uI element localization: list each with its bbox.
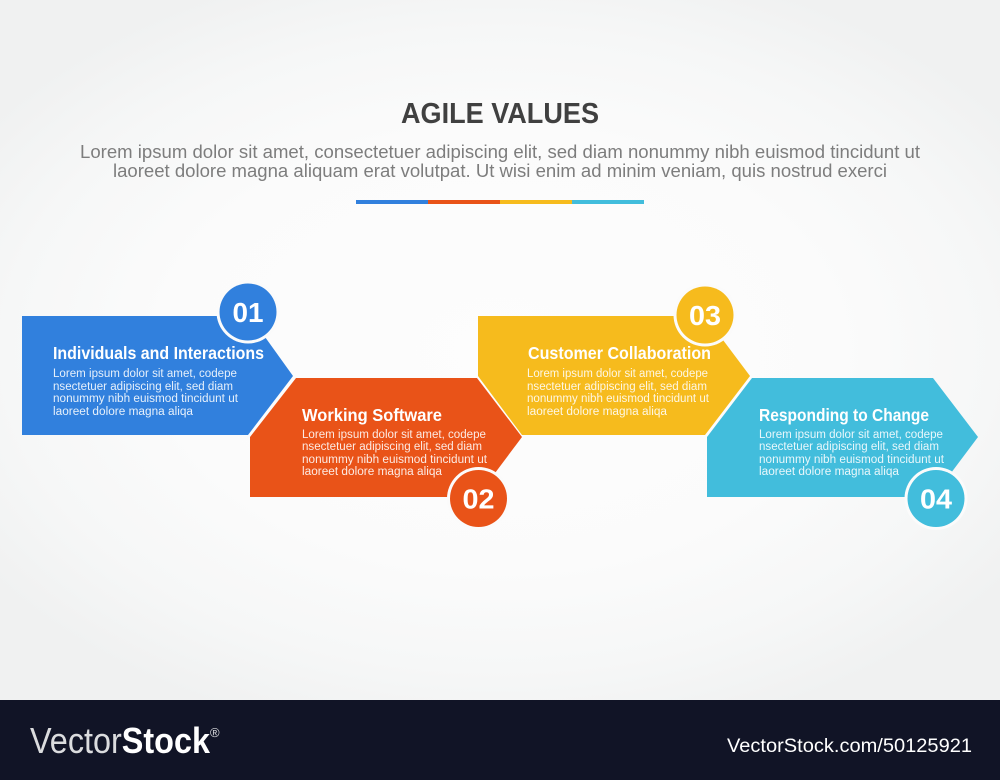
blue arrow shape (22, 316, 293, 435)
heading: Responding to Change (759, 405, 929, 425)
body text (759, 429, 945, 478)
number badge 04: 04 (920, 484, 952, 514)
colored divider bar (356, 200, 644, 204)
body text: Lorem ipsum dolor sit amet, codepe (53, 368, 237, 380)
body text (302, 429, 488, 478)
body text (527, 368, 710, 418)
body text: nsectetuer adipiscing elit, sed diam (527, 381, 707, 393)
body text: nonummy nibh euismod tincidunt ut (527, 393, 710, 405)
number badge 03: 03 (689, 300, 721, 331)
body text: Lorem ipsum dolor sit amet, codepe (527, 368, 708, 380)
teal hexagon shape (707, 378, 978, 497)
heading: Working Software (302, 405, 442, 425)
number badge 01 (216, 280, 280, 344)
body text: laoreet dolore magna aliqa (759, 466, 900, 478)
footer logo: ® (210, 725, 220, 740)
heading: Individuals and Interactions (53, 343, 264, 363)
body text: laoreet dolore magna aliqa (53, 406, 194, 418)
panel: individuals and interactions (22, 280, 293, 435)
subtitle text (80, 142, 920, 181)
body text: nsectetuer adipiscing elit, sed diam (53, 381, 233, 393)
yellow notched arrow shape (478, 316, 750, 435)
heading: Customer Collaboration (528, 343, 711, 363)
title: AGILE VALUES (401, 98, 599, 130)
body text: nonummy nibh euismod tincidunt ut (302, 454, 488, 466)
body text: Lorem ipsum dolor sit amet, codepe (302, 429, 486, 441)
body text (53, 368, 239, 418)
panel: customer collaboration (478, 284, 750, 435)
body text: nsectetuer adipiscing elit, sed diam (759, 441, 939, 453)
subtitle text: Lorem ipsum dolor sit amet, consectetuer adipiscing elit, sed diam nonummy nibh euismod tincidunt ut (80, 142, 920, 162)
number badge 03 (674, 284, 736, 346)
panel: working software (250, 378, 522, 530)
orange hexagon shape (250, 378, 522, 497)
number badge 01: 01 (232, 297, 264, 328)
panel: responding to change (707, 378, 978, 530)
body text: nonummy nibh euismod tincidunt ut (759, 454, 945, 466)
footer logo: VectorStock (30, 720, 211, 761)
body text: nonummy nibh euismod tincidunt ut (53, 393, 239, 405)
body text: laoreet dolore magna aliqa (527, 406, 668, 418)
footer image id: VectorStock.com/50125921 (727, 736, 972, 757)
body text: nsectetuer adipiscing elit, sed diam (302, 441, 482, 453)
number badge 04 (904, 467, 968, 530)
footer bar (0, 700, 1000, 780)
number badge 02 (447, 467, 510, 530)
subtitle text: laoreet dolore magna aliquam erat volutpat. Ut wisi enim ad minim veniam, quis nostrud exerci (113, 161, 887, 181)
number badge 02: 02 (462, 484, 494, 514)
body text: Lorem ipsum dolor sit amet, codepe (759, 429, 943, 441)
body text: laoreet dolore magna aliqa (302, 466, 443, 478)
